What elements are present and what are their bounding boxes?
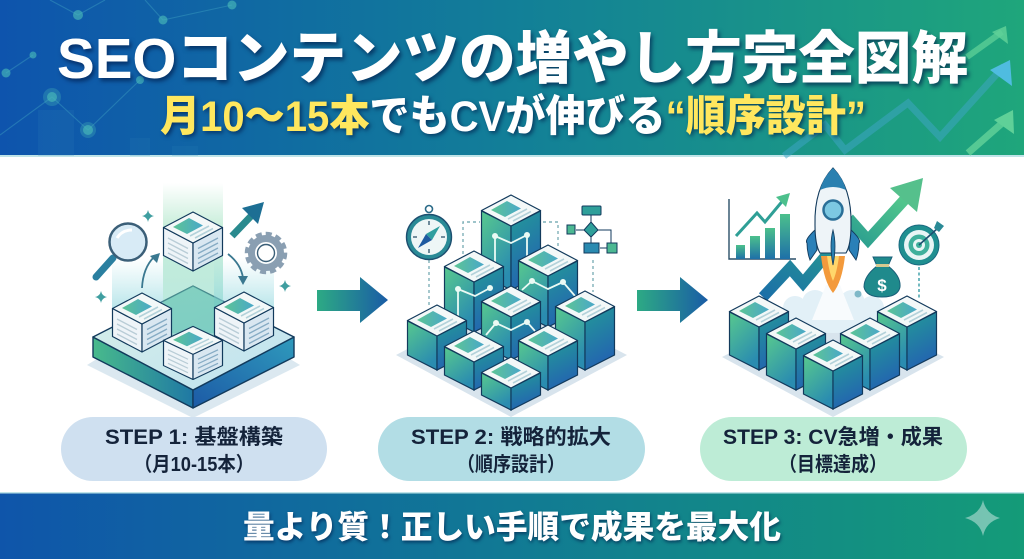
block I [482,357,540,410]
decorative rising arrows [784,32,1008,156]
icon: sparkles [95,210,291,303]
icon: money bag: $ [877,276,887,295]
label: step 2: （順序設計） [457,453,565,476]
page block: top [164,212,222,271]
block G [444,331,504,390]
block a [730,296,788,370]
rising zigzag arrow [763,178,923,297]
icon: compass [406,206,452,260]
block H [518,325,578,390]
label: step 2: STEP 2: 戦略的拡大 [411,426,611,449]
icon: curved arrows [142,254,243,288]
label: step 1 [61,417,327,481]
block B [444,251,504,332]
illustration: step 1 foundation [87,183,300,418]
arrow: step 1 to step 2 [317,277,388,323]
rocket [806,168,860,293]
block C [518,245,578,327]
block b [766,318,826,390]
page block: right [214,292,274,351]
block D [482,286,540,360]
page block: front [164,326,222,380]
dashed connectors [429,222,593,305]
illustration: step 2 strategic expansion [396,195,627,417]
label: step 3: STEP 3: CV急増・成果 [723,425,943,449]
arrow: step 2 to step 3 [637,277,708,323]
decorative network [0,0,232,135]
block c [878,296,936,370]
title: SEOコンテンツの増やし方完全図解 [57,27,968,91]
block d [840,318,900,390]
bar chart [729,193,796,259]
label: step 3: （目標達成） [779,452,887,476]
platform [87,286,300,418]
icon: growth arrow [232,202,264,236]
page block: left [112,293,172,352]
label: step 1: STEP 1: 基盤構築 [105,426,283,449]
block A [482,195,540,290]
exhaust cloud [781,285,885,333]
icon: magnifier [96,224,146,277]
icon: flow chart [567,206,617,253]
footer message: 量より質！正しい手順で成果を最大化 [243,509,781,545]
label: step 2 [378,417,645,481]
icon: money bag [864,257,900,297]
block E [556,291,614,370]
illustration: step 3 results [722,168,944,417]
icon: target [899,221,944,300]
block e [804,340,862,409]
footer band [0,492,1024,559]
block F [408,305,466,370]
label: step 1: （月10-15本） [134,453,254,476]
light columns [112,183,274,350]
icon: footer sparkle [965,500,1000,536]
subtitle: 月10〜15本でもCVが伸びる“順序設計” [160,92,866,141]
header band [0,0,1024,157]
label: step 3 [700,417,967,481]
icon: gear [247,234,285,272]
